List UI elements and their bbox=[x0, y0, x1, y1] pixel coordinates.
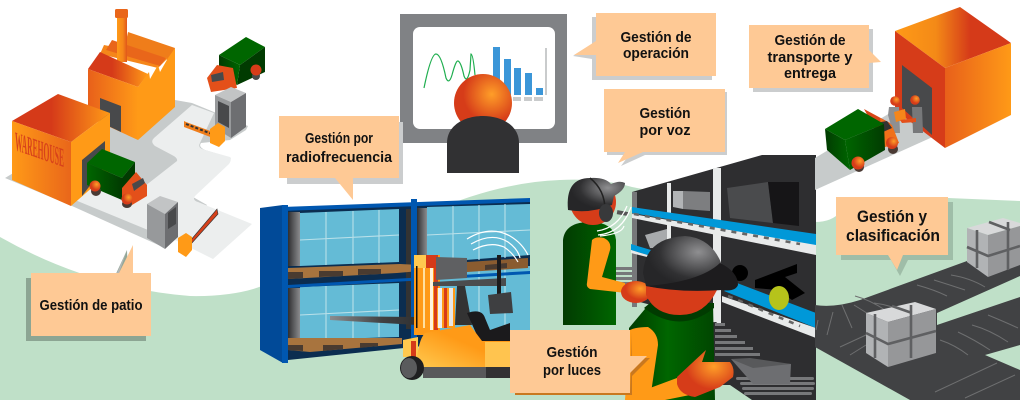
monitor screen bbox=[413, 27, 555, 129]
conveyor behind shelf bbox=[616, 267, 646, 290]
callout: Gestión de operación: Gestión de bbox=[620, 29, 692, 46]
lower conveyor bbox=[700, 322, 815, 400]
microphone bbox=[617, 210, 628, 216]
pallets bbox=[288, 258, 528, 352]
person: light picker bbox=[625, 236, 738, 400]
icon: warehouse building bbox=[12, 94, 110, 206]
pane grid lines bbox=[300, 204, 530, 339]
callout: Gestión por luces: por luces bbox=[543, 362, 601, 379]
chimney bbox=[115, 9, 128, 62]
callout: Gestión por voz bbox=[604, 89, 727, 166]
forklift body bbox=[403, 325, 510, 367]
road bbox=[815, 110, 937, 190]
viewer head bbox=[454, 74, 512, 132]
callout: Gestión y clasificación bbox=[836, 197, 953, 276]
callout: Gestión de operación: operación bbox=[623, 45, 689, 62]
green landscape background bbox=[0, 180, 1020, 400]
hand bbox=[677, 350, 734, 397]
forklift base bbox=[423, 367, 510, 378]
mast load block bbox=[436, 257, 467, 280]
voice waves bbox=[597, 206, 631, 236]
viewer body bbox=[447, 116, 519, 173]
chart axis marks bbox=[513, 48, 547, 101]
icon: workers handing package bbox=[888, 95, 923, 133]
lower light strip bbox=[631, 244, 816, 338]
belt markings bbox=[816, 275, 1018, 398]
beacon pole bbox=[497, 255, 501, 295]
icon: lower barrier bbox=[178, 209, 218, 257]
icon: delivery truck bbox=[825, 109, 899, 172]
icon: green truck at entrance bbox=[207, 37, 265, 92]
body bbox=[563, 222, 616, 325]
panel: delivery scene bbox=[815, 7, 1011, 190]
arm bbox=[587, 237, 626, 293]
forearm bbox=[650, 375, 690, 400]
callout: Gestión de patio: Gestión de patio bbox=[40, 297, 142, 314]
icon: factory bbox=[88, 9, 175, 140]
head bbox=[570, 179, 616, 225]
icon: delivery building bbox=[895, 7, 1011, 148]
yard ground bbox=[5, 100, 252, 259]
callout: Gestión por radiofrecuencia: radiofrecuencia bbox=[286, 149, 393, 166]
rack uprights shading bbox=[288, 208, 427, 340]
icon: lower gate booth bbox=[147, 196, 178, 249]
shelf uprights bbox=[632, 168, 721, 323]
callout: Gestión de transporte y entrega: entrega bbox=[784, 65, 837, 82]
callout: Gestión de transporte y entrega bbox=[749, 25, 881, 92]
callout: Gestión de transporte y entrega: Gestión de bbox=[774, 32, 846, 49]
headset bbox=[590, 178, 605, 210]
arm bbox=[625, 327, 658, 400]
callout: Gestión por radiofrecuencia: Gestión por bbox=[305, 130, 373, 147]
mast bbox=[414, 255, 455, 335]
callout: Gestión de patio bbox=[26, 245, 151, 341]
panel: pallet rack bbox=[260, 198, 530, 363]
panel: picking shelves bbox=[616, 155, 816, 400]
icon: package front bbox=[866, 302, 936, 367]
shelf boxes bbox=[645, 182, 799, 248]
callout: Gestión y clasificación: Gestión y bbox=[857, 207, 927, 226]
rack side bbox=[260, 205, 283, 363]
front wheel bbox=[400, 356, 424, 380]
icon: upper gate booth bbox=[215, 87, 246, 138]
panel: monitor with charts bbox=[400, 14, 567, 173]
collar shadow bbox=[644, 303, 714, 322]
cab roof bbox=[433, 278, 506, 286]
monitor frame bbox=[400, 14, 567, 143]
callout: Gestión de operación bbox=[573, 13, 716, 80]
panel: yard management scene bbox=[5, 9, 265, 259]
icon: package back bbox=[967, 218, 1020, 277]
callout: Gestión por voz: por voz bbox=[640, 122, 690, 139]
earpiece bbox=[599, 204, 613, 222]
cap brim bbox=[646, 263, 738, 291]
callout: Gestión y clasificación: clasificación bbox=[846, 226, 940, 245]
cab post bbox=[455, 286, 472, 325]
forklift bbox=[330, 255, 513, 380]
bar chart bbox=[493, 47, 543, 95]
line chart bbox=[424, 54, 475, 88]
icon: warehouse building: WAREHOUSE bbox=[15, 127, 64, 174]
cap bbox=[568, 178, 625, 211]
callout: Gestión por voz: Gestión bbox=[640, 105, 690, 122]
callout: Gestión de transporte y entrega: transporte y bbox=[768, 49, 853, 66]
rack blue beams bbox=[282, 198, 530, 363]
callout: Gestión por luces bbox=[510, 330, 650, 395]
icon: green truck at warehouse bbox=[87, 149, 147, 208]
cap bbox=[643, 236, 722, 290]
scanner bbox=[732, 264, 805, 310]
glass panes bbox=[300, 204, 530, 340]
conveyor belts bbox=[815, 232, 1020, 400]
body bbox=[629, 303, 715, 400]
head bbox=[646, 275, 717, 315]
panel: sorting conveyors bbox=[815, 218, 1020, 400]
hand bbox=[621, 281, 651, 303]
seat back box bbox=[488, 292, 513, 314]
person: voice picker bbox=[563, 178, 651, 325]
upper light strip bbox=[632, 207, 816, 255]
forks bbox=[330, 316, 417, 325]
callout: Gestión por luces: Gestión bbox=[546, 344, 598, 361]
callout: Gestión por radiofrecuencia bbox=[279, 116, 403, 200]
icon: upper barrier bbox=[184, 121, 225, 147]
seat bbox=[467, 311, 510, 342]
icon: radio waves bbox=[467, 231, 528, 262]
shelf body bbox=[632, 155, 816, 400]
rack interior bbox=[288, 199, 530, 360]
